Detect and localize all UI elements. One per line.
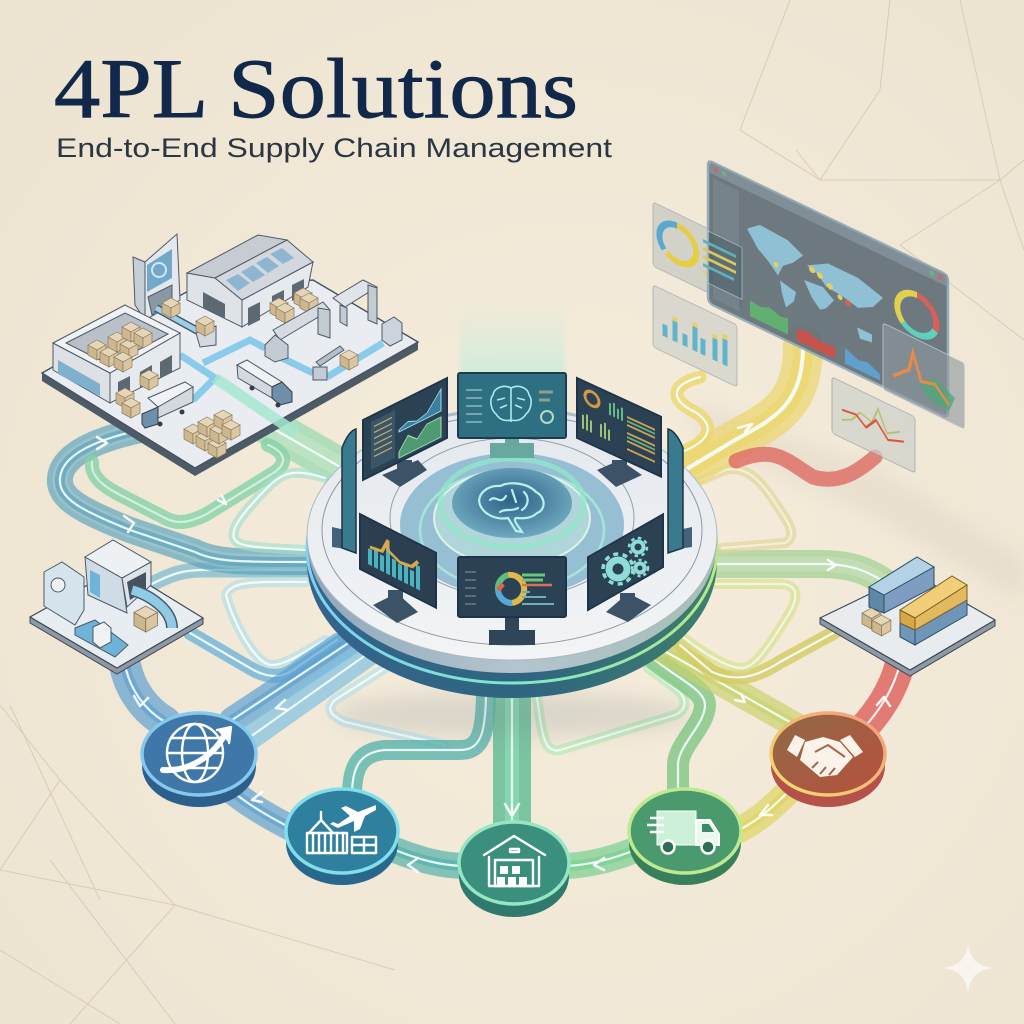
monitor top-center [458,373,566,458]
gabled warehouse [187,235,313,327]
icon: handshake [787,735,863,777]
sign tower [133,234,180,320]
hub top surface [307,410,717,660]
monitor bottom-center [458,557,566,645]
donut chart [498,575,524,603]
outfeed conveyor [132,590,172,628]
dashboard panel: peak chart [883,323,965,430]
node: delivery truck [629,789,741,885]
icon: truck [647,811,719,854]
dashboard mini charts [750,298,788,334]
truck 1 [142,382,193,428]
hub junction glows [362,644,664,691]
pallet of boxes [184,410,240,458]
icon: container and plane [307,812,376,853]
dashboard panel: overlap stat list [703,229,742,299]
title: 4PL Solutions [54,42,578,136]
monitor bottom-right [588,514,663,622]
stacked containers [900,600,967,645]
yellow and red routes, lower right [645,469,900,832]
node: global network [142,713,256,807]
monitor top-right [577,378,661,487]
gears icon [603,538,648,584]
dashboard panel: world map [708,160,948,418]
blue machine blocks [75,620,128,657]
internal blue paths [180,340,383,400]
frame left [44,562,84,625]
central hub [307,373,717,737]
brain icon screen [491,386,531,422]
truck 2 [237,360,292,408]
hub shadow [332,693,692,737]
hub core [452,468,572,538]
factory building [85,557,127,613]
shadow under floating dashboards [690,400,1024,600]
factory platform [30,540,203,674]
icon: globe [163,724,231,782]
monitor far-right [668,429,692,553]
open warehouse [53,305,180,403]
yellow and red routes to dashboards [677,345,875,479]
icon: warehouse [484,836,545,886]
dashboard panel: bars [653,285,737,387]
brain icon center [479,483,544,532]
route direction arrows [97,424,890,872]
dashboard panel: donut [653,202,742,309]
node: warehouse [459,822,569,917]
warehouse campus [42,234,418,476]
monitor top-left [363,378,447,487]
watermark sparkle [943,944,993,993]
monitor bottom-left [360,514,436,623]
hub base [307,426,717,698]
conveyor [156,308,205,335]
teal and green routes, left [60,420,342,585]
stored boxes [88,322,152,372]
platform [42,342,418,476]
blue routes, lower left [125,582,445,830]
container platform [820,557,995,676]
robotic gates [265,280,402,380]
node: air and ocean freight [286,789,398,885]
map continents [747,219,883,354]
node: partnership [771,713,885,807]
dashboard panel: line chart [832,377,915,473]
light beam above hub [460,300,565,400]
hub glow rings [400,453,624,597]
carton [134,606,157,632]
subtitle: End-to-End Supply Chain Management [56,133,613,163]
dashboard donut [897,286,936,344]
blue container [869,557,934,597]
monitor far-left [332,429,356,553]
teal and green routes, bottom [352,660,705,866]
